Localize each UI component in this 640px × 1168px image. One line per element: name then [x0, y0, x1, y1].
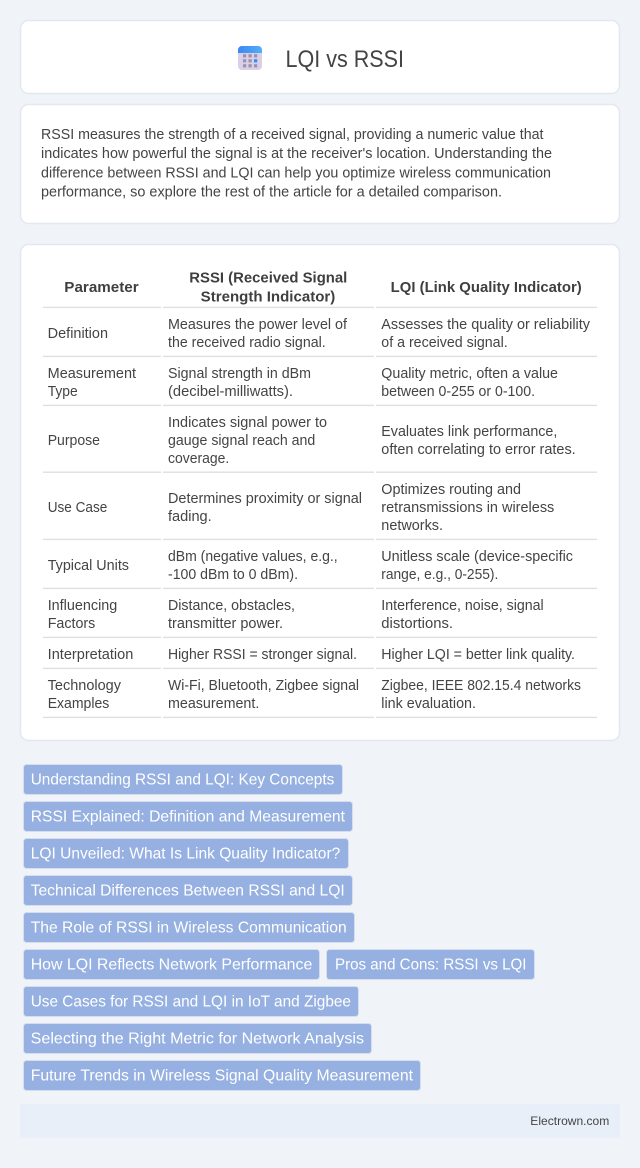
row: influencing factors: distortions. [381, 616, 453, 632]
row: interpretation: Interpretation [48, 647, 133, 663]
tag: selecting metric: Selecting the Right Metric for Network Analysis [31, 1030, 364, 1048]
panel: comparison table [20, 244, 620, 740]
row: influencing factors: Distance, obstacles, [168, 598, 295, 614]
table header row: Strength Indicator) [201, 290, 335, 306]
row: technology examples: Zigbee, IEEE 802.15.4 networks [381, 678, 581, 694]
tag: future trends: Future Trends in Wireless Signal Quality Measurement [31, 1068, 414, 1084]
table header row [64, 271, 582, 306]
tag: technical differences: Technical Differences Between RSSI and LQI [31, 882, 345, 900]
row: technology examples: Wi-Fi, Bluetooth, Zigbee signal [168, 678, 359, 694]
intro text [41, 127, 552, 200]
tag: future trends [24, 1060, 420, 1090]
row: purpose: Evaluates link performance, [381, 424, 557, 440]
tag: lqi network performance: How LQI Reflects Network Performance [31, 956, 312, 974]
row: measurement type: (decibel-milliwatts). [168, 384, 293, 400]
panel: introduction [20, 104, 620, 224]
intro text: performance, so explore the rest of the article for a detailed comparison. [41, 184, 502, 200]
row: typical units: dBm (negative values, e.g., [168, 549, 338, 565]
row: use case: Determines proximity or signal [168, 491, 362, 507]
table header row: LQI (Link Quality Indicator) [391, 280, 582, 296]
row: technology examples [48, 678, 581, 712]
row: measurement type: Measurement [48, 366, 136, 382]
icon: calendar [238, 46, 262, 70]
row: measurement type: Quality metric, often a value [381, 366, 558, 382]
row: influencing factors [48, 598, 544, 632]
footer credit: Electrown.com [530, 1114, 609, 1128]
row: definition: Assesses the quality or reliability [381, 317, 591, 333]
row: technology examples: link evaluation. [381, 696, 476, 712]
row: typical units: Typical Units [48, 558, 129, 574]
row: influencing factors: Influencing [48, 598, 117, 614]
row: typical units: range, e.g., 0-255). [381, 567, 498, 583]
row: definition: of a received signal. [381, 335, 508, 351]
row: definition: the received radio signal. [168, 335, 326, 351]
row: definition: Measures the power level of [168, 317, 348, 333]
tag: understanding [24, 764, 342, 794]
intro text: RSSI measures the strength of a received signal, providing a numeric value that [41, 127, 544, 143]
row: use case: retransmissions in wireless [381, 500, 554, 516]
row: measurement type: Signal strength in dBm [168, 366, 311, 382]
tag: lqi network performance [24, 950, 320, 980]
tag: rssi explained [24, 802, 352, 832]
row: technology examples: Technology [48, 678, 122, 694]
row: typical units: Unitless scale (device-specific [381, 549, 573, 565]
row: influencing factors: Factors [48, 616, 95, 632]
row: definition [48, 317, 591, 351]
tag: understanding: Understanding RSSI and LQI: Key Concepts [31, 772, 334, 788]
table header row: Parameter [64, 280, 139, 296]
row: purpose: Indicates signal power to [168, 415, 327, 431]
row: measurement type: between 0-255 or 0-100. [381, 384, 535, 400]
row: purpose: often correlating to error rates. [381, 442, 576, 458]
tag: role of rssi: The Role of RSSI in Wireless Communication [31, 920, 347, 936]
tag: lqi unveiled [24, 838, 348, 868]
tag: use cases: Use Cases for RSSI and LQI in IoT and Zigbee [31, 994, 351, 1010]
row: influencing factors: Interference, noise, signal [381, 598, 544, 614]
row: interpretation: Higher RSSI = stronger signal. [168, 647, 357, 663]
row: use case: fading. [168, 509, 212, 525]
tag: selecting metric [24, 1024, 372, 1054]
row: interpretation [48, 647, 575, 663]
row: use case: Optimizes routing and [381, 482, 521, 498]
row: technology examples: Examples [48, 696, 109, 712]
row: typical units [48, 549, 573, 583]
row: use case: networks. [381, 518, 443, 534]
tag: technical differences [24, 876, 352, 906]
tag: pros and cons [326, 950, 534, 980]
row: purpose: gauge signal reach and [168, 433, 315, 449]
footer [20, 1104, 620, 1138]
row: measurement type: Type [48, 384, 78, 400]
tag: role of rssi [24, 912, 354, 942]
row: influencing factors: transmitter power. [168, 616, 283, 632]
row: definition: Definition [48, 326, 108, 342]
intro text: indicates how powerful the signal is at the receiver's location. Understanding the [41, 146, 552, 162]
row: typical units: -100 dBm to 0 dBm). [168, 567, 298, 583]
tag: pros and cons: Pros and Cons: RSSI vs LQI [335, 956, 526, 974]
row: purpose: Purpose [48, 433, 100, 449]
tag: rssi explained: RSSI Explained: Definition and Measurement [31, 808, 346, 826]
title: LQI vs RSSI [286, 46, 404, 73]
row: purpose [48, 415, 576, 467]
tag: lqi unveiled: LQI Unveiled: What Is Link Quality Indicator? [31, 846, 340, 862]
header panel [20, 20, 620, 94]
row: technology examples: measurement. [168, 696, 259, 712]
intro text: difference between RSSI and LQI can help you optimize wireless communication [41, 166, 551, 182]
row: use case: Use Case [48, 500, 107, 516]
row: interpretation: Higher LQI = better link quality. [381, 647, 575, 663]
topic links [24, 764, 534, 1090]
row: use case [48, 482, 554, 534]
row: purpose: coverage. [168, 451, 229, 467]
row: measurement type [48, 366, 558, 400]
table header row: RSSI (Received Signal [189, 271, 347, 287]
tag: use cases [24, 986, 358, 1016]
